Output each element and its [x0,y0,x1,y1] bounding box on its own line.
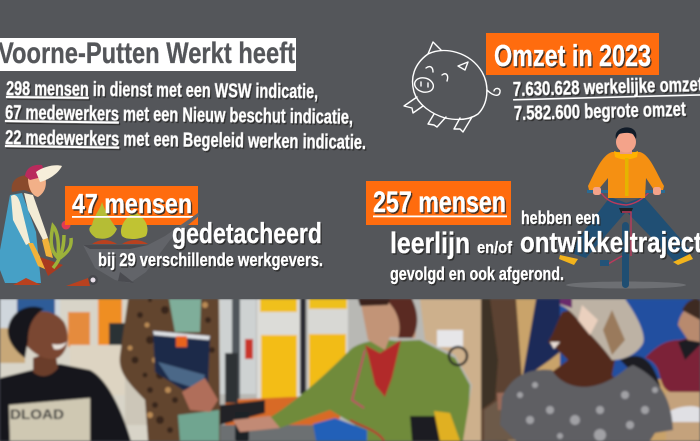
panel: 47 mensen: 47 mensen [72,188,192,219]
icon: gardener [0,165,71,285]
photo: man with black sweater and colleagues [0,298,482,441]
text block: staff numbers [5,78,366,154]
icon: piggy bank [404,42,500,132]
figure: man in green sweater [233,299,470,441]
text: gedetacheerd: gedetacheerd [172,218,322,250]
text block: leerlijn en ontwikkeltraject: gevolgd en ook afgerond. [390,264,564,284]
panel: 257 mensen: 257 mensen [373,186,506,219]
panel: 257 mensen [366,181,511,225]
figure: woman with leopard coat [120,298,220,441]
photo: smiling woman with headscarf [481,299,700,441]
panel: Omzet in 2023: Omzet in 2023 [494,38,651,73]
title: Voorne-Putten Werkt heeft: Voorne-Putten Werkt heeft [0,37,295,70]
text block: leerlijn en ontwikkeltraject: leerlijn [390,227,470,260]
figure: man in black sweater: DLOAD [10,406,64,422]
text block: staff numbers: 22 medewerkers met een Begeleid werken indicatie. [5,127,366,154]
text block: leerlijn en ontwikkeltraject [390,208,700,284]
text: bij 29 verschillende werkgevers: bij 29 verschillende werkgevers. [98,250,323,270]
text block: omzet numbers [513,74,700,125]
text block: leerlijn en ontwikkeltraject: en/of [477,238,512,257]
panel: Omzet in 2023 [486,33,659,75]
text block: leerlijn en ontwikkeltraject: hebben een [521,208,600,228]
text block: staff numbers: 67 medewerkers met een Nieuw beschut indicatie, [5,102,353,129]
icon: wheelbarrow [66,213,199,286]
photo strip [0,298,700,441]
figure: man in black sweater [0,307,131,441]
cardboard boxes [420,299,481,441]
text block: staff numbers: 298 mensen in dienst met een WSW indicatie, [6,78,318,103]
icon: cyclist [559,127,693,289]
panel: 47 mensen [65,186,198,239]
